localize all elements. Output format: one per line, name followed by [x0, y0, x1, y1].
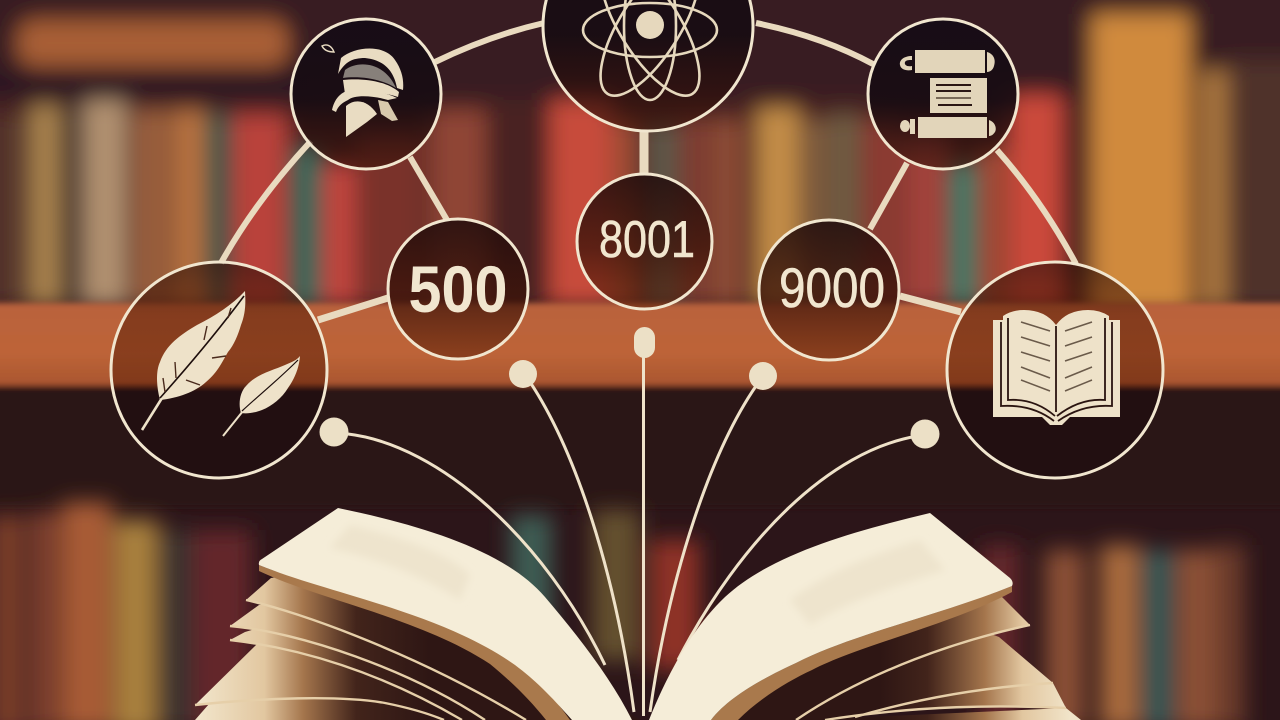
node: open book [947, 262, 1163, 478]
icon: open book [993, 310, 1120, 425]
left page stack [195, 560, 640, 720]
node: helmet era [291, 19, 441, 169]
node: 500 [388, 219, 528, 359]
connector lines between circles [221, 23, 1076, 320]
icon: large feather [142, 291, 245, 430]
node: 9000 [759, 220, 899, 360]
branching stems from book [348, 350, 918, 716]
left page text shading [330, 525, 470, 600]
right top page [649, 513, 1013, 720]
icon: scroll [900, 50, 996, 138]
node: atom [543, 0, 753, 131]
icon: helmet [322, 45, 403, 137]
icon: small feather [223, 356, 300, 436]
stem end dots [320, 327, 940, 448]
open book illustration [195, 508, 1081, 720]
node: quill era [111, 262, 327, 478]
node: 500: 500 [408, 252, 508, 326]
icon: atom [582, 0, 718, 110]
right page text shading [790, 540, 945, 625]
right page edge [711, 586, 1012, 720]
node: 9000: 9000 [779, 256, 885, 319]
node: 8001 [577, 174, 712, 309]
left page edge [259, 565, 570, 720]
right page stack [650, 570, 1081, 720]
left top page [259, 508, 632, 720]
node: 8001: 8001 [599, 211, 695, 269]
node: scroll [868, 19, 1018, 169]
